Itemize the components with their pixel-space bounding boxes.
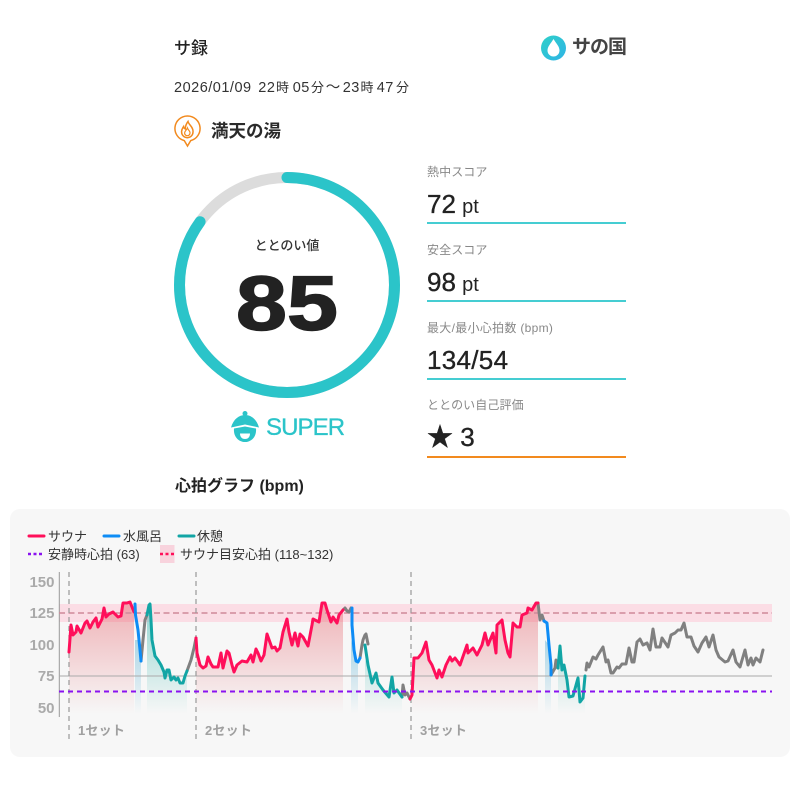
y axis labels [29, 574, 54, 717]
date and time: 時 [276, 80, 289, 95]
date and time [174, 80, 409, 96]
y axis labels: 75 [38, 668, 54, 685]
set labels [78, 723, 467, 738]
set labels: 3セット [420, 723, 467, 738]
ring gauge: ととのい値 85: ととのい値 [255, 238, 319, 253]
legend: サウナ [48, 529, 87, 544]
logo: サの国: サの国 [572, 37, 626, 58]
rank: SUPER: SUPER [266, 414, 344, 441]
score: 最大/最小心拍数: 134/54 [427, 345, 508, 375]
set labels: 2セット [205, 723, 252, 738]
score: 最大/最小心拍数: 最大/最小心拍数 (bpm) [427, 321, 553, 335]
date and time: 2026/01/09 [174, 80, 252, 96]
area fills under heart-rate line [69, 602, 585, 714]
score: 安全スコア: 98 pt [427, 267, 479, 297]
title: サ録 [174, 39, 208, 58]
panel: heart-rate chart [10, 509, 790, 757]
set labels: 1セット [78, 723, 125, 738]
date and time: 05 [293, 80, 310, 96]
score: ととのい自己評価: ★ 3 [427, 422, 475, 452]
y axis labels: 50 [38, 700, 54, 717]
legend: 安静時心拍 (63) [48, 547, 140, 562]
axis and reference lines [59, 572, 772, 740]
sauna target band [59, 604, 772, 622]
score: ととのい自己評価: ととのい自己評価 [427, 398, 524, 412]
facility name with pin icon [174, 115, 281, 148]
legend [28, 529, 333, 563]
legend: サウナ目安心拍 (118~132) [180, 547, 333, 562]
score: 熱中スコア: 72 pt [427, 189, 479, 219]
legend: 水風呂 [123, 529, 162, 544]
score: 最大/最小心拍数 [427, 321, 626, 380]
resting heart-rate line [59, 690, 772, 692]
logo: サの国 [541, 36, 626, 60]
ring gauge: ととのい値 85 [174, 172, 400, 398]
date and time: 時 [360, 80, 374, 95]
legend: 休憩 [197, 529, 223, 544]
rank: SUPER [231, 411, 344, 442]
ring gauge: ととのい値 85: 85 [236, 261, 338, 347]
score: ととのい自己評価 [427, 398, 626, 458]
date and time: 分 [396, 80, 409, 95]
score: 安全スコア: 安全スコア [427, 243, 488, 257]
date and time: 23 [343, 80, 360, 96]
date and time: ～ [326, 80, 340, 96]
date and time: 47 [377, 80, 394, 96]
heart-rate line [69, 602, 763, 702]
date and time: 22 [258, 80, 275, 96]
y axis labels: 150 [29, 574, 54, 591]
facility name with pin icon: 満天の湯 [211, 121, 281, 141]
y axis labels: 125 [29, 605, 54, 622]
chart heading: 心拍グラフ (bpm) [175, 478, 304, 495]
y axis labels: 100 [29, 637, 54, 654]
date and time: 分 [311, 80, 324, 95]
score: 安全スコア [427, 243, 626, 302]
score: 熱中スコア: 熱中スコア [427, 165, 488, 179]
score: 熱中スコア [427, 165, 626, 224]
